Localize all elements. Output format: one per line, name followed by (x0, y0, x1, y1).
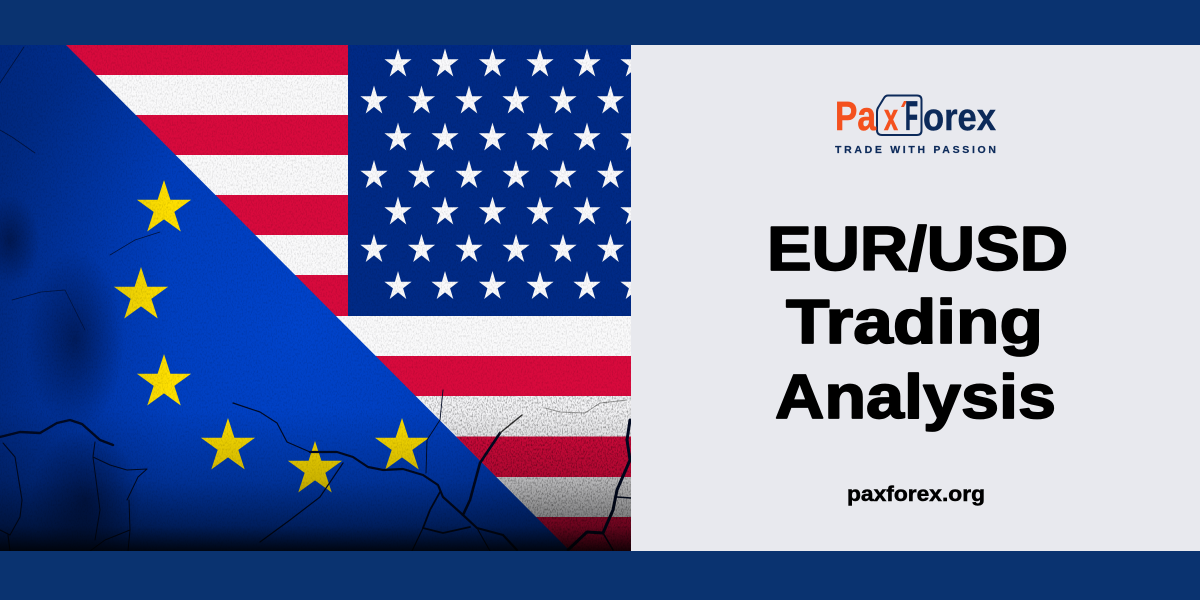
logo letter x: x (884, 97, 898, 139)
title line 1: EUR/USD (767, 215, 1068, 284)
heavier grain on lower US stripes (418, 396, 631, 546)
logo: PaxForex (835, 93, 996, 156)
logo box (877, 96, 922, 135)
logo word: Pa: Pa (835, 93, 877, 139)
EU flag triangle (0, 45, 570, 551)
logo word: orex: orex (923, 97, 996, 139)
cracks in the wall (0, 47, 631, 551)
logo tick (901, 101, 907, 107)
bottom vignette (0, 410, 631, 551)
title line 3: Analysis (775, 363, 1056, 432)
title (767, 215, 1068, 432)
panel: right background (631, 45, 1200, 551)
logo tagline: TRADE WITH PASSION (835, 144, 996, 156)
grain texture (0, 45, 631, 551)
EU yellow stars (114, 180, 429, 493)
website url: paxforex.org (847, 482, 985, 506)
logo letter F: F (905, 93, 918, 139)
title line 2: Trading (786, 288, 1043, 357)
shading on EU side (0, 45, 151, 544)
US canton with white stars (348, 45, 648, 316)
flag image: EU and US flags with cracks (0, 45, 631, 551)
US flag stripes (0, 45, 631, 551)
